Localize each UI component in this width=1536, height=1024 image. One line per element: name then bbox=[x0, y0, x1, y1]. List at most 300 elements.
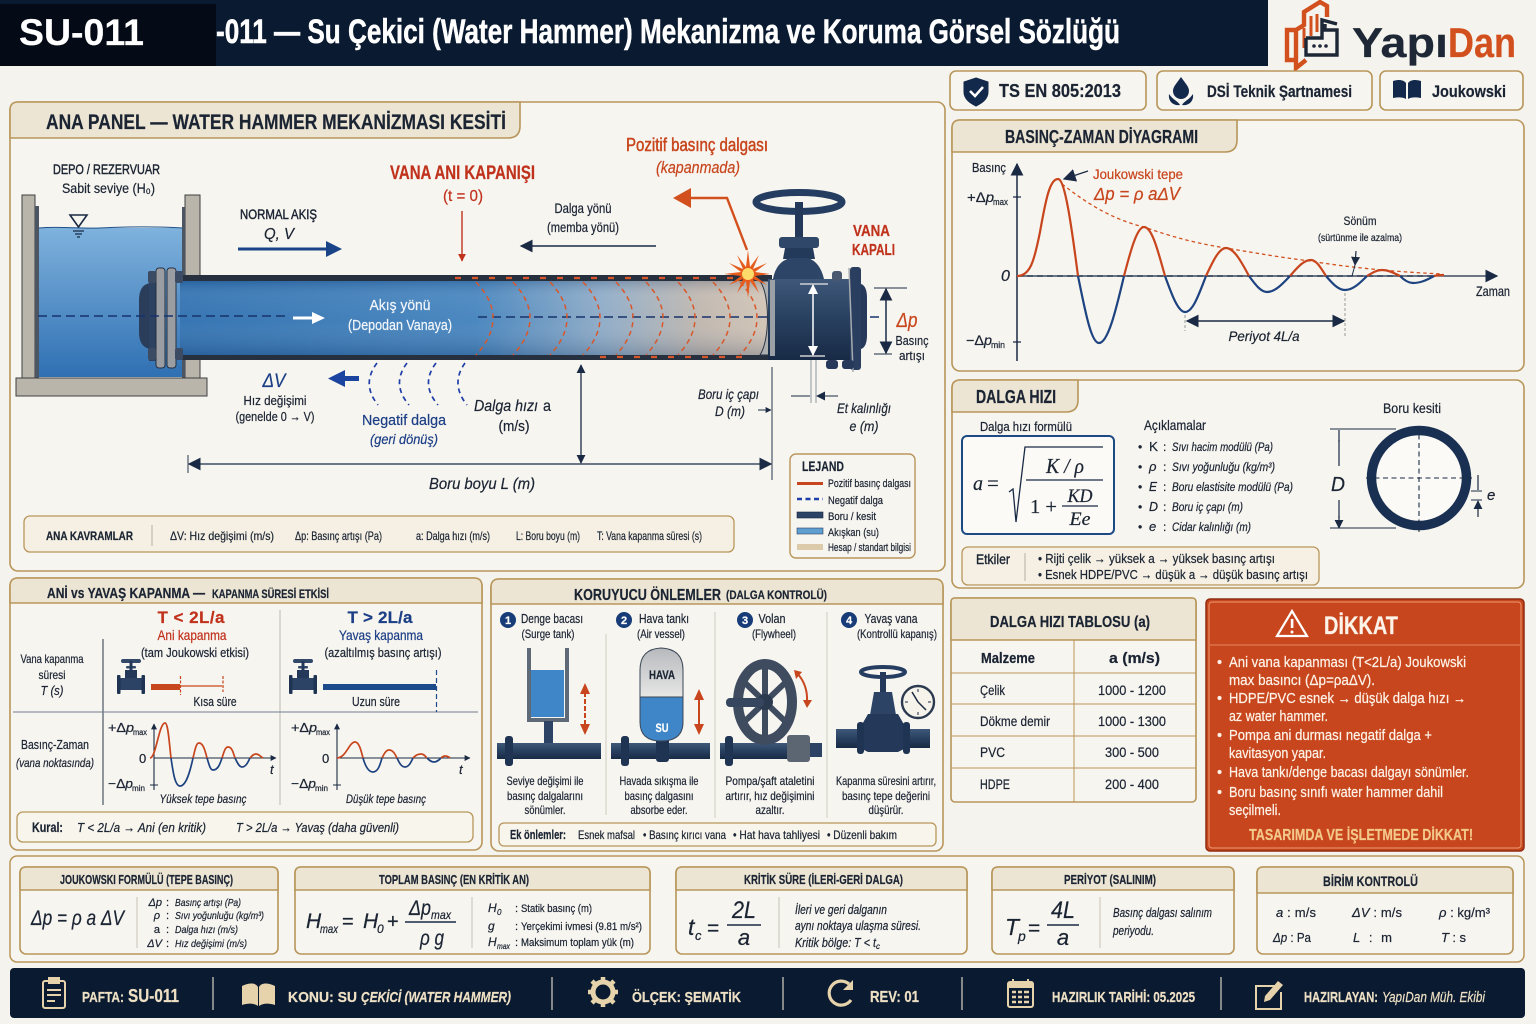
row label: pressure-time: (vana noktasında) bbox=[16, 756, 94, 770]
panel: pressure-time diagram bbox=[952, 120, 1524, 371]
warning list: • bbox=[1217, 691, 1222, 707]
key concepts strip: ΔV: Hız değişimi (m/s) bbox=[170, 529, 274, 543]
measure 3: flywheel: azaltır. bbox=[756, 803, 784, 817]
label: delta V: ΔV bbox=[262, 371, 288, 392]
column: slow closure header: Yavaş kapanma bbox=[339, 627, 423, 643]
label: normal flow: Q, V bbox=[264, 226, 295, 243]
card: Joukowski formula: : bbox=[166, 924, 169, 936]
measure 1: surge tank: sönümler. bbox=[524, 803, 566, 817]
measure 4: slow valve: basınç tepe değerini bbox=[842, 789, 930, 803]
pipe cross-section bbox=[1330, 400, 1495, 532]
badge: TS EN 805:2013: TS EN 805:2013 bbox=[999, 81, 1121, 101]
icon: calendar bbox=[1008, 979, 1033, 1007]
arrow: rotation bbox=[794, 670, 812, 708]
card: Joukowski formula: Dalga hızı (m/s) bbox=[175, 924, 238, 936]
measure 1: surge tank: (Surge tank) bbox=[522, 627, 575, 641]
card: period: T bbox=[1005, 914, 1021, 940]
row label: closure time: süresi bbox=[38, 668, 66, 682]
formula label: Dalga hızı formülü bbox=[980, 419, 1072, 434]
pipe cross-section: e bbox=[1487, 487, 1495, 504]
effects box: Etkiler bbox=[976, 551, 1010, 567]
footer: subject bbox=[288, 989, 511, 1006]
card: total pressure: H bbox=[363, 910, 379, 933]
measure 2: air vessel: Havada sıkışma ile bbox=[620, 774, 699, 788]
footer: sheet: SU-011 bbox=[128, 986, 179, 1006]
card: total pressure: H bbox=[488, 935, 497, 949]
card: critical time: 2L bbox=[731, 897, 756, 924]
icon: book bbox=[242, 983, 275, 1006]
warning list: max basıncı (Δp=ρaΔV). bbox=[1229, 673, 1375, 689]
card: total pressure bbox=[295, 867, 650, 954]
icon: air vessel: SU bbox=[656, 721, 668, 735]
axis label: pressure: Basınç bbox=[972, 160, 1006, 175]
explanations: : bbox=[1163, 460, 1166, 474]
explanations: Boru elastisite modülü (Pa) bbox=[1172, 480, 1293, 494]
closed valve bbox=[756, 192, 867, 372]
card: total pressure: Δp bbox=[408, 897, 431, 920]
explanations: : bbox=[1163, 520, 1166, 534]
warning list: az water hammer. bbox=[1229, 709, 1328, 725]
measure 3: flywheel: Pompa/şaft ataletini bbox=[726, 774, 814, 788]
arrow: closure moment bbox=[461, 211, 463, 261]
closure burst bbox=[724, 250, 770, 298]
rule box: Kural: bbox=[32, 819, 63, 835]
explanations: • bbox=[1138, 480, 1142, 494]
warning list: kavitasyon yapar. bbox=[1229, 746, 1326, 762]
measure 4: slow valve: Yavaş vana bbox=[864, 611, 918, 626]
card: total pressure: H bbox=[488, 901, 497, 915]
label: positive wave bbox=[626, 135, 768, 177]
explanations: Boru iç çapı (m) bbox=[1172, 500, 1243, 514]
label: valve closed bbox=[852, 223, 895, 259]
explanations: ρ bbox=[1148, 459, 1157, 474]
measure 4: slow valve bbox=[836, 611, 937, 817]
rule box: T < 2L/a → Ani (en kritik) bbox=[77, 820, 206, 835]
panel: protective measures bbox=[491, 579, 943, 851]
negative pressure curve bbox=[1078, 276, 1434, 343]
bar: long time: Uzun süre bbox=[352, 694, 400, 709]
legend: Negatif dalga bbox=[828, 495, 884, 507]
measure 1: surge tank: basınç dalgalarını bbox=[507, 789, 583, 803]
mini chart: slow closure bbox=[291, 720, 470, 806]
footer: sheet bbox=[82, 986, 179, 1006]
label: positive wave: Pozitif basınç dalgası bbox=[626, 135, 768, 155]
icon: gear bbox=[588, 977, 618, 1007]
key concepts strip: L: Boru boyu (m) bbox=[516, 529, 580, 543]
axis label: +dp max: max bbox=[993, 197, 1008, 207]
dimension: delta p bbox=[874, 288, 929, 363]
column: slow closure header: (azaltılmış basınç artışı) bbox=[324, 645, 442, 660]
additional measures box: • Hat hava tahliyesi bbox=[733, 828, 820, 842]
card: Joukowski formula: Δp = ρ a ΔV bbox=[30, 907, 126, 930]
card: total pressure: 0 bbox=[377, 922, 384, 936]
footer: prepared by bbox=[1304, 989, 1486, 1006]
mini chart: fast closure: t bbox=[270, 762, 275, 777]
chart axes bbox=[1013, 164, 1497, 361]
table rows: 1000 - 1200 bbox=[1098, 682, 1166, 698]
formula box: wave speed: a bbox=[973, 471, 983, 495]
legend: Boru / kesit bbox=[828, 511, 876, 523]
dimension: delta p: artışı bbox=[899, 348, 925, 363]
measure 2: air vessel: 2 bbox=[621, 615, 627, 627]
footer: sheet: PAFTA: bbox=[82, 989, 124, 1006]
arrow: normal flow bbox=[238, 241, 342, 257]
effects box: • Rijti çelik → yüksek a → yüksek basınç artışı bbox=[1038, 551, 1275, 566]
table rows: Dökme demir bbox=[980, 713, 1050, 729]
badge: Joukowski: Joukowski bbox=[1432, 82, 1506, 101]
explanations: Sıvı yoğunluğu (kg/m³) bbox=[1172, 460, 1275, 474]
dimension: internal section bbox=[812, 285, 814, 355]
label: wave direction: (memba yönü) bbox=[547, 219, 619, 235]
rule box bbox=[17, 812, 473, 842]
icon: clipboard bbox=[43, 978, 65, 1008]
positive pressure curve bbox=[1017, 179, 1444, 276]
card: total pressure: TOPLAM BASINÇ (EN KRİTİK AN) bbox=[379, 872, 529, 887]
measure 4: slow valve: (Kontrollü kapanış) bbox=[857, 627, 937, 641]
icon: edit bbox=[1256, 981, 1283, 1009]
text: flow direction: Akış yönü bbox=[370, 297, 430, 314]
table rows: 200 - 400 bbox=[1105, 776, 1159, 792]
label: normal flow: NORMAL AKIŞ bbox=[240, 206, 317, 222]
card: total pressure: max bbox=[431, 908, 452, 922]
card: period bbox=[992, 867, 1234, 954]
dimension: wall thickness: Et kalınlığı bbox=[837, 400, 891, 416]
key concepts strip: T: Vana kapanma süresi (s) bbox=[597, 529, 702, 543]
additional measures box: • Basınç kırıcı vana bbox=[643, 828, 726, 842]
warning heading: DİKKAT bbox=[1324, 612, 1398, 640]
badge: TS EN 805:2013 bbox=[950, 71, 1146, 110]
callout: damping: Sönüm bbox=[1344, 214, 1376, 228]
panel: warning bbox=[1206, 599, 1524, 851]
mini chart: fast closure bbox=[108, 720, 276, 806]
mini chart: fast closure: max bbox=[133, 728, 147, 737]
key concepts strip bbox=[24, 516, 734, 552]
formula box: wave speed: KD bbox=[1067, 486, 1093, 507]
panel: formula strip bbox=[10, 856, 1524, 962]
logo: YapıDan: Dan bbox=[1448, 19, 1516, 66]
card: total pressure: : bbox=[515, 921, 518, 933]
card: period: = bbox=[1028, 917, 1040, 940]
dimension: inner diameter: D (m) bbox=[715, 403, 745, 419]
key concepts strip: ANA KAVRAMLAR bbox=[46, 529, 133, 543]
table rows: 1000 - 1300 bbox=[1098, 713, 1166, 729]
label: wave speed: (m/s) bbox=[498, 418, 530, 435]
warning list: • bbox=[1217, 765, 1222, 781]
additional measures box: Esnek mafsal bbox=[578, 828, 635, 842]
dimension: wall thickness bbox=[791, 360, 891, 434]
arrow: wave direction bbox=[521, 245, 656, 247]
warning list: Pompa ani durması negatif dalga + bbox=[1229, 728, 1432, 744]
panel: wave speed table bbox=[951, 598, 1196, 802]
label: instant closure: VANA ANI KAPANIŞI bbox=[390, 163, 535, 184]
row label: closure time: T (s) bbox=[40, 683, 64, 698]
table rows bbox=[980, 650, 1166, 792]
formula box: wave speed: K / ρ bbox=[1045, 454, 1084, 478]
measure 4: slow valve: 4 bbox=[846, 615, 853, 627]
label: delta V: Hız değişimi bbox=[244, 393, 307, 408]
pipe bbox=[180, 275, 772, 360]
dimension: pipe length bbox=[188, 367, 772, 493]
card: unit check: T : s bbox=[1441, 930, 1466, 945]
card: total pressure: Statik basınç (m) bbox=[521, 903, 592, 915]
effects box: • Esnek HDPE/PVC → düşük a → düşük basınç artışı bbox=[1038, 567, 1308, 582]
measure 4: slow valve: düşürür. bbox=[868, 803, 904, 817]
card: unit check: ρ : kg/m³ bbox=[1438, 905, 1491, 920]
main title: -011 — Su Çekici (Water Hammer) Mekanizma ve Koruma Görsel Sözlüğü bbox=[216, 13, 1120, 51]
footer: subject: KONU: SU bbox=[288, 989, 357, 1006]
panel: main water hammer section bbox=[10, 102, 945, 571]
measure 1: surge tank bbox=[497, 611, 601, 817]
mini chart: slow closure: +Δp bbox=[291, 720, 317, 735]
panel heading: ANA PANEL — WATER HAMMER MEKANİZMASI KESİTİ bbox=[46, 111, 506, 134]
row label: pressure-time bbox=[16, 737, 94, 770]
icon: air vessel bbox=[611, 648, 710, 766]
callout: Joukowski peak bbox=[1064, 166, 1183, 204]
bar: short time bbox=[151, 676, 236, 709]
dimension: delta p: Δp bbox=[896, 310, 918, 332]
card: unit check: BİRİM KONTROLÜ bbox=[1323, 873, 1418, 889]
icon: flywheel bbox=[720, 664, 822, 766]
flow arrow bbox=[293, 312, 325, 324]
key concepts strip: Δp: Basınç artışı (Pa) bbox=[295, 529, 382, 543]
label: wave speed: Dalga hızı bbox=[474, 398, 538, 415]
card: total pressure: = bbox=[342, 911, 354, 933]
legend bbox=[790, 454, 915, 558]
card: Joukowski formula: : bbox=[166, 897, 169, 909]
warning list: Hava tankı/denge bacası dalgayı sönümler. bbox=[1229, 765, 1469, 781]
panel: wave speed bbox=[952, 380, 1524, 588]
card: total pressure: max bbox=[320, 922, 339, 936]
measure 1: surge tank: 1 bbox=[505, 615, 511, 627]
badge: DSİ Teknik Şartnamesi bbox=[1157, 71, 1372, 110]
card: Joukowski formula: a bbox=[154, 924, 161, 936]
axis label: zero: 0 bbox=[1001, 268, 1010, 285]
axis label: -dp min: −Δp bbox=[966, 332, 992, 348]
axis label: +dp max: +Δp bbox=[967, 189, 994, 205]
card: total pressure: : bbox=[515, 937, 518, 949]
measure 2: air vessel bbox=[611, 611, 710, 817]
explanations: Açıklamalar bbox=[1144, 417, 1206, 433]
card: critical time: İleri ve geri dalganın bbox=[795, 903, 887, 917]
card: period: periyodu. bbox=[1112, 924, 1154, 938]
heading: KORUYUCU ÖNLEMLER bbox=[574, 585, 721, 604]
card: period: Basınç dalgası salınım bbox=[1113, 906, 1212, 920]
measure 1: surge tank: Denge bacası bbox=[521, 611, 583, 626]
card: critical time: KRİTİK SÜRE (İLERİ-GERİ DALGA) bbox=[744, 872, 903, 887]
measure 1: surge tank: Seviye değişimi ile bbox=[506, 774, 584, 788]
measure 2: air vessel: absorbe eder. bbox=[630, 803, 688, 817]
icon: small valve fast bbox=[117, 659, 145, 694]
column: fast closure header: (tam Joukowski etkisi) bbox=[141, 645, 249, 660]
legend: Akışkan (su) bbox=[828, 527, 879, 539]
pipe cross-section: Boru kesiti bbox=[1383, 400, 1441, 416]
table rows: Çelik bbox=[980, 682, 1006, 698]
logo: YapıDan: Yapı bbox=[1352, 19, 1448, 66]
column: fast closure header: Ani kapanma bbox=[158, 627, 227, 643]
card: period: PERİYOT (SALINIM) bbox=[1064, 872, 1156, 887]
legend: LEJAND bbox=[802, 458, 844, 474]
arrow: positive wave callout bbox=[673, 188, 747, 250]
mini chart: slow closure: −Δp bbox=[291, 776, 316, 791]
dimension: delta p: Basınç bbox=[896, 333, 929, 348]
label: instant closure: (t = 0) bbox=[443, 188, 483, 205]
dimension: pipe length: Boru boyu L (m) bbox=[429, 476, 535, 493]
warning list: Boru basınç sınıfı water hammer dahil bbox=[1229, 785, 1443, 801]
callout: damping: (sürtünme ile azalma) bbox=[1318, 233, 1402, 244]
formula box: wave speed bbox=[962, 436, 1114, 534]
card: total pressure: Maksimum toplam yük (m) bbox=[521, 937, 634, 949]
card: total pressure: 0 bbox=[497, 908, 502, 917]
rule box: T > 2L/a → Yavaş (daha güvenli) bbox=[236, 820, 399, 835]
dimension: wall thickness: e (m) bbox=[850, 418, 878, 434]
card: Joukowski formula: : bbox=[166, 910, 169, 922]
card: critical time: a bbox=[738, 925, 750, 950]
measure 2: air vessel: basınç dalgasını bbox=[624, 789, 694, 803]
label: valve closed: KAPALI bbox=[852, 242, 895, 259]
column: fast closure header: T < 2L/a bbox=[158, 608, 225, 627]
measure 4: slow valve: Kapanma süresini artırır, bbox=[836, 774, 936, 788]
axis label: time: Zaman bbox=[1476, 283, 1510, 299]
card: Joukowski formula: Basınç artışı (Pa) bbox=[175, 897, 241, 909]
badge: DSİ Teknik Şartnamesi: DSİ Teknik Şartnamesi bbox=[1207, 82, 1352, 101]
heading: KAPANMA SÜRESİ ETKİSİ bbox=[212, 586, 329, 601]
label: delta V bbox=[236, 371, 314, 424]
label: valve closed: VANA bbox=[853, 223, 890, 240]
explanations: • bbox=[1138, 500, 1142, 514]
dimension: period: Periyot 4L/a bbox=[1228, 328, 1300, 344]
card: period: p bbox=[1017, 928, 1026, 944]
mini chart: slow closure: max bbox=[316, 728, 330, 737]
measure 3: flywheel: 3 bbox=[742, 615, 748, 627]
card: critical time: = bbox=[707, 917, 719, 940]
row label: closure time: Vana kapanma bbox=[20, 652, 84, 666]
card: unit check: Δp : Pa bbox=[1272, 930, 1312, 945]
panel: fast vs slow closure bbox=[10, 578, 482, 850]
mini chart: slow closure: min bbox=[315, 784, 328, 793]
card: Joukowski formula: Sıvı yoğunluğu (kg/m³) bbox=[175, 910, 264, 922]
measure 3: flywheel: artırır, hız değişimini bbox=[726, 789, 814, 803]
card: critical time bbox=[676, 867, 967, 954]
card: unit check bbox=[1257, 867, 1513, 954]
label: wave speed: a bbox=[543, 398, 551, 415]
additional measures box: • Düzenli bakım bbox=[827, 828, 897, 842]
explanations: K bbox=[1149, 439, 1158, 454]
warning list bbox=[1217, 655, 1469, 819]
explanations: E bbox=[1149, 479, 1157, 494]
mini chart: fast closure: min bbox=[132, 784, 145, 793]
card: Joukowski formula bbox=[20, 867, 278, 954]
text: flow direction: (Depodan Vanaya) bbox=[348, 317, 452, 334]
card: total pressure: max bbox=[497, 942, 511, 951]
heading bbox=[47, 585, 329, 602]
measure 2: air vessel: Hava tankı bbox=[639, 611, 689, 626]
card: Joukowski formula: JOUKOWSKI FORMÜLÜ (TEPE BASINÇ) bbox=[60, 872, 233, 887]
bar: short time: Kısa süre bbox=[194, 694, 236, 709]
icon: water drop in hands bbox=[1169, 77, 1193, 105]
icon: open book bbox=[1393, 80, 1421, 99]
heading bbox=[574, 585, 827, 604]
icon: air vessel: HAVA bbox=[649, 668, 675, 682]
arrow: surge movement bbox=[580, 683, 590, 735]
icon: refresh bbox=[829, 980, 853, 1005]
footer: scale: ÖLÇEK: ŞEMATİK bbox=[632, 989, 741, 1006]
warning footer: TASARIMDA VE İŞLETMEDE DİKKAT! bbox=[1249, 826, 1473, 844]
explanations bbox=[1138, 417, 1293, 534]
label: normal flow bbox=[240, 206, 317, 243]
icon: surge tank bbox=[497, 648, 601, 766]
key concepts strip: a: Dalga hızı (m/s) bbox=[416, 529, 490, 543]
card: critical time: c bbox=[876, 942, 880, 951]
mini chart: slow closure: Düşük tepe basınç bbox=[346, 792, 426, 806]
decay envelope bbox=[1062, 184, 1443, 274]
formula box: wave speed: Ee bbox=[1068, 509, 1090, 530]
heading: DALGA HIZI bbox=[976, 387, 1056, 407]
warning list: • bbox=[1217, 785, 1222, 801]
explanations: • bbox=[1138, 520, 1142, 534]
axis label: -dp min bbox=[966, 332, 1005, 350]
card: critical time: aynı noktaya ulaşma süresi. bbox=[795, 919, 921, 933]
measure 3: flywheel: Volan bbox=[758, 611, 786, 626]
card: total pressure: ρ g bbox=[419, 927, 444, 950]
label: wave speed bbox=[474, 398, 551, 435]
card: total pressure: g bbox=[488, 919, 495, 933]
icon: valve with gauge bbox=[836, 667, 934, 754]
mini chart: fast closure: 0 bbox=[139, 751, 146, 766]
table grid bbox=[951, 640, 1196, 802]
formula box: wave speed: 1 + bbox=[1030, 496, 1057, 518]
legend: Hesap / standart bilgisi bbox=[828, 542, 911, 554]
measure 2: air vessel: (Air vessel) bbox=[637, 627, 685, 641]
explanations: • bbox=[1138, 440, 1142, 454]
explanations: : bbox=[1163, 440, 1166, 454]
table rows: a (m/s) bbox=[1109, 650, 1160, 667]
label: negative wave: Negatif dalga bbox=[362, 412, 447, 429]
explanations: e bbox=[1149, 519, 1156, 534]
measure 3: flywheel: (Flywheel) bbox=[752, 627, 796, 641]
pipe cross-section: D bbox=[1331, 474, 1345, 496]
label: negative wave bbox=[362, 412, 447, 447]
column: fast closure header bbox=[141, 608, 249, 660]
warning list: • bbox=[1217, 655, 1222, 671]
warning list: seçilmeli. bbox=[1229, 803, 1281, 819]
explanations: Sıvı hacim modülü (Pa) bbox=[1172, 440, 1273, 454]
mini chart: fast closure: −Δp bbox=[108, 776, 133, 791]
table rows: Malzeme bbox=[981, 650, 1035, 667]
card: critical time: Kritik bölge: T < t bbox=[795, 936, 876, 950]
card: Joukowski formula: : bbox=[166, 938, 169, 950]
card: total pressure: H bbox=[306, 910, 322, 933]
warning list: • bbox=[1217, 728, 1222, 744]
heading: ANİ vs YAVAŞ KAPANMA — bbox=[47, 585, 205, 602]
effects box bbox=[962, 547, 1319, 585]
footer: subject: ÇEKİCİ (WATER HAMMER) bbox=[361, 989, 511, 1006]
icon: warning triangle bbox=[1277, 611, 1307, 636]
row label: pressure-time: Basınç-Zaman bbox=[21, 737, 89, 752]
mini chart: slow closure: 0 bbox=[322, 751, 329, 766]
reservoir bbox=[16, 195, 207, 396]
callout: Joukowski peak: Δp = ρ aΔV bbox=[1093, 184, 1182, 204]
card: period: 4L bbox=[1051, 897, 1075, 924]
heading: BASINÇ-ZAMAN DİYAGRAMI bbox=[1005, 127, 1198, 147]
callout: Joukowski peak: Joukowski tepe bbox=[1093, 166, 1183, 182]
additional measures box: Ek önlemler: bbox=[510, 827, 566, 842]
label: positive wave: (kapanmada) bbox=[656, 158, 740, 177]
label: instant closure bbox=[390, 163, 535, 205]
card: period: a bbox=[1057, 925, 1069, 950]
inlet flange bbox=[139, 268, 183, 368]
dimension: inner diameter bbox=[698, 386, 771, 419]
header bar bbox=[0, 0, 1268, 66]
